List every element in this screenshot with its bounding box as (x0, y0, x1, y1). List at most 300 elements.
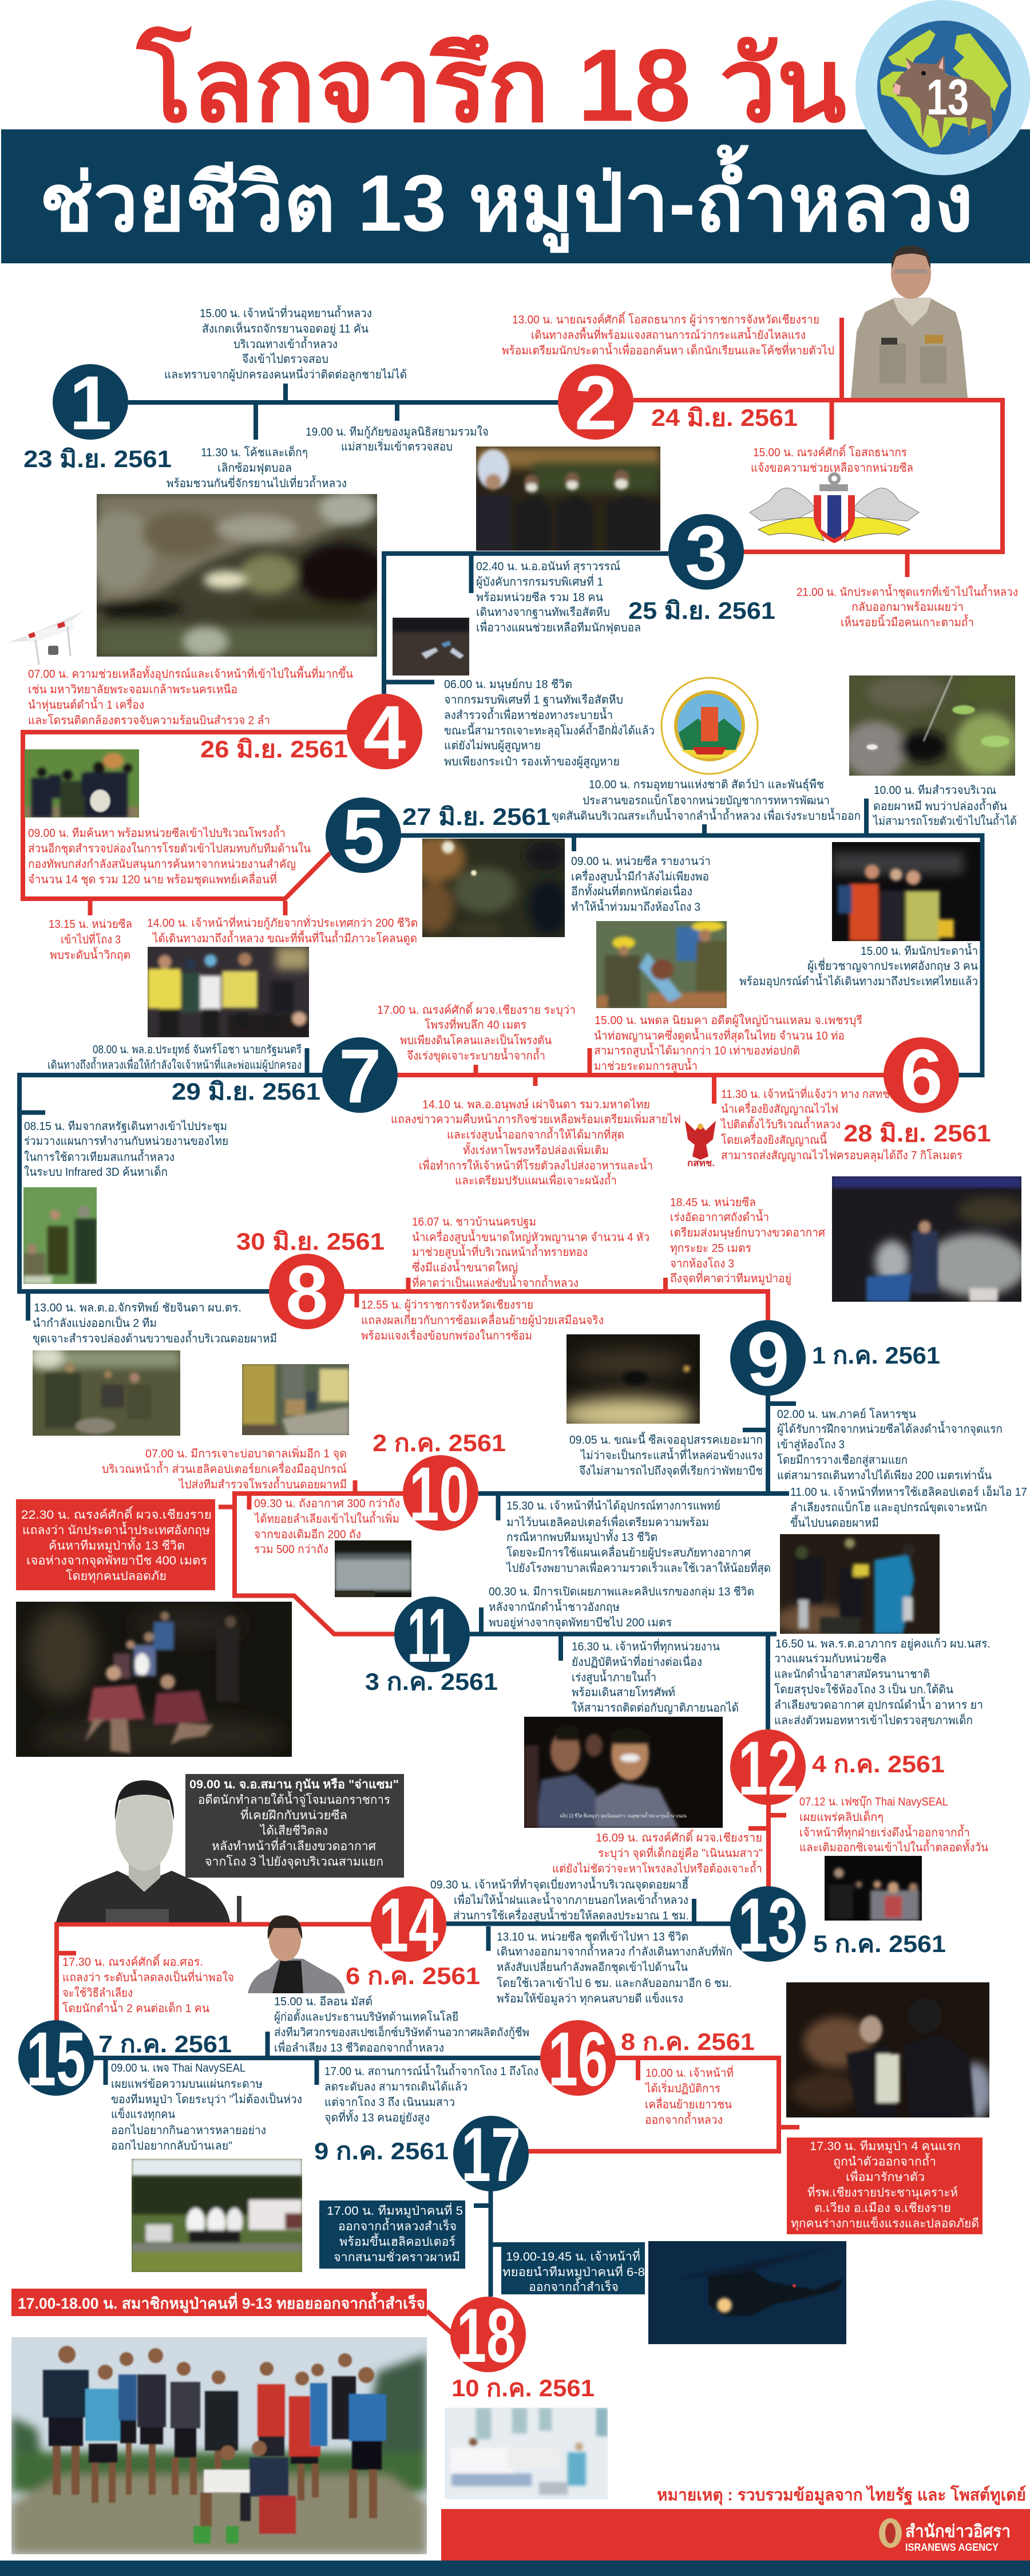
day 4 text 07.00 (28, 666, 353, 727)
day 6 text 14.10: และเร่งสูบน้ำออกจากถ้ำให้ได้มากที่สุด (447, 1127, 624, 1142)
day 8 text 18.45: 18.45 น. หน่วยซีล (670, 1196, 756, 1209)
day 6 text 11.30: โดยเครื่องยิงสัญญาณนี้ (721, 1132, 827, 1147)
day 3 text 06.00: แต่ยังไม่พบผู้สูญหาย (444, 739, 541, 753)
footer panel with Isranews logo (441, 2509, 1030, 2561)
day 4 text 14.00 (147, 915, 418, 946)
day 5 text 09.00: อีกทั้งฝนที่ตกหนักต่อเนื่อง (571, 883, 692, 898)
day 10 text 07.00 (102, 1445, 347, 1491)
day 14 connectors (57, 1896, 371, 2021)
day 8 text 18.45 (670, 1196, 825, 1286)
day 2 text 13.00: เดินทางลงพื้นที่พร้อมแจงสถานการณ์ว่ากระแสน้ำยังไหลแรง (531, 327, 806, 342)
day 1 date: 23 มิ.ย. 2561 (23, 445, 172, 472)
day 4 date: 26 มิ.ย. 2561 (200, 736, 348, 762)
day 16 date: 8 ก.ค. 2561 (621, 2028, 755, 2055)
day 11 text 16.50: 16.50 น. พล.ร.ต.อาภากร อยู่คงแก้ว ผบ.นสร. (775, 1638, 991, 1651)
day 11 text 16.30 (572, 1638, 739, 1714)
day 10 text 07.00: บริเวณหน้าถ้ำ ส่วนเฮลิคอปเตอร์ยกเครื่องมืออุปกรณ์ (102, 1461, 347, 1476)
day 7 text 08.15: ในระบบ Infrared 3D ค้นหาเด็ก (24, 1164, 168, 1179)
day 2 text 15.00 (751, 444, 913, 475)
day 4 text 13.15: พบระดับน้ำวิกฤต (50, 947, 130, 962)
day 2 text 13.00 (502, 311, 834, 357)
photo: cave interior (97, 494, 377, 657)
day 8 text 16.07: นำเครื่องสูบน้ำขนาดใหญ่หัวพญานาค จำนวน 4 หัว (412, 1229, 649, 1244)
callout: Saman Gunan death: หลังทำหน้าที่ลำเลียงขวดอากาศ (212, 1838, 377, 1853)
day 14 text 17.30 (62, 1953, 234, 2015)
photo: smiling boys in foil blankets: คลิป 13 ชีวิต ทีมหมูป่า จุดเนินนมสาว วนอุทยานถ้ำหลวง-ขุนน้ำนางนอน (560, 1812, 687, 1819)
day 11 text 16.50: โดยสรุปจะใช้ห้องโถง 3 เป็น บก.ใต้ดิน (774, 1682, 953, 1697)
day 6 text 15.00: 15.00 น. นพดล นิยมคา อดีตผู้ใหญ่บ้านแหลม จ.เพชรบุรี (595, 1014, 862, 1028)
day 14 text 15.00: 15.00 น. อีลอน มัสต์ (274, 1995, 373, 2008)
icon: globe with boar and number 13: 13 (926, 69, 969, 125)
day 15 text 09.00: ออกไปอยากกลับบ้านเลย" (111, 2139, 232, 2152)
day 11 text 16.30: 16.30 น. เจ้าหน้าที่ทุกหน่วยงาน (572, 1638, 720, 1654)
day 8 text 13.00 (33, 1301, 277, 1346)
icon: national parks department emblem (661, 678, 758, 774)
callout: Saman Gunan death (185, 1774, 404, 1878)
day 10 text 09.30: 09.30 น. ถังอากาศ 300 กว่าถัง (254, 1498, 400, 1510)
day 15 connectors (94, 2032, 541, 2085)
day 10 text 15.30: ไปยังโรงพยาบาลเพื่อความรวดเร็วและใช้เวลาให้น้อยที่สุด (505, 1560, 771, 1575)
day 8 text 13.00: นำกำลังแบ่งออกเป็น 2 ทีม (33, 1315, 157, 1330)
day 6 text 15.00: สามารถสูบน้ำได้มากกว่า 10 เท่าของท่อปกติ (594, 1042, 800, 1058)
day 1 text 19.00: 19.00 น. ทีมกู้ภัยของมูลนิธิสยามรวมใจ (306, 425, 489, 439)
day 2 text 13.00: พร้อมเตรียมนักประดาน้ำเพื่อออกค้นหา เด็กนักเรียนและโค้ชที่หายตัวไป (502, 342, 834, 357)
day 10 text 11.00: ลำเลียงรถแบ็กโฮ และอุปกรณ์ขุดเจาะหนัก (790, 1500, 987, 1515)
callout: first four boys rescued: เพื่อมารักษาตัว (846, 2168, 925, 2184)
day 8 text 12.55: 12.55 น. ผู้ว่าราชการจังหวัดเชียงราย (361, 1299, 533, 1312)
day 4 text 09.00: ส่วนอีกชุดสำรวจปล่องในการโรยตัวเข้าไปสมทบกับทีมด้านใน (28, 842, 311, 856)
callout: first four boys rescued: ทุกคนร่างกายแข็งแรงและปลอดภัยดี (791, 2215, 979, 2231)
day 12 connectors (748, 1804, 786, 1887)
day 10 text 15.30: โดยจะมีการใช้แผนเคลื่อนย้ายผู้ประสบภัยทางอากาศ (506, 1544, 751, 1560)
callout: first four boys rescued: ต.เวียง อ.เมือง จ.เชียงราย (814, 2202, 951, 2215)
photo: divers wading (786, 1982, 989, 2117)
day 9 text 02.00: แต่สามารถเดินทางไปได้เพียง 200 เมตรเท่านั้น (777, 1467, 992, 1482)
day 1 text 15.00: สังเกตเห็นรถจักรยานจอดอยู่ 11 คัน (202, 321, 369, 336)
callout: final boys rescued: 17.00-18.00 น. สมาชิกหมูป่าคนที่ 9-13 ทยอยออกจากถ้ำสำเร็จ (18, 2291, 425, 2313)
day 5 text 15.00 divers: 15.00 น. ทีมนักประดาน้ำ (861, 943, 978, 958)
day 4 text 13.15 (49, 918, 132, 962)
day 1 text 11.30: พร้อมชวนกันขี่จักรยานไปเที่ยวถ้ำหลวง (167, 475, 347, 490)
day 5 text 10.00 department: ประสานขอรถแบ็กโฮจากหน่วยบัญชาการทหารพัฒนา (583, 793, 830, 807)
callout: fifth boy rescued: พร้อมขึ้นเฮลิคอปเตอร์ (339, 2233, 455, 2249)
photo: helicopter and umbrellas (132, 2159, 302, 2272)
day 6 text 17.00 (377, 1001, 576, 1063)
day 4 text 14.00: ได้เดินทางมาถึงถ้ำหลวง ขณะที่พื้นที่ในถ้ำมีภาวะโคลนดูด (152, 930, 417, 946)
day 8 text 12.55: พร้อมแจงเรื่องข้อบกพร่องในการซ้อม (361, 1327, 532, 1342)
day 11 text 16.50: และส่งตัวหมอทหารเข้าไปตรวจสุขภาพเด็ก (774, 1713, 973, 1728)
photo: rescue officers in forest (25, 749, 139, 817)
day 10 text 15.30: กรณีหากพบทีมหมูป่าทั้ง 13 ชีวิต (506, 1529, 657, 1544)
callout: first four boys rescued (787, 2138, 983, 2234)
callout: Saman Gunan death: ได้เสียชีวิตลง (259, 1824, 328, 1838)
callout: Saman Gunan death: ที่เคยฝึกกับหน่วยซีล (240, 1807, 347, 1822)
day 5 text 09.00 (571, 855, 711, 914)
arrow: connector from final callout to day 18 (427, 2311, 453, 2334)
day 3 text 06.00: 06.00 น. มนุษย์กบ 18 ชีวิต (444, 678, 572, 692)
day 6 text 14.10: เพื่อทำการให้เจ้าหน้าที่โรยตัวลงไปส่งอาหารและน้ำ (419, 1157, 653, 1172)
callout: fifth boy rescued (319, 2200, 465, 2269)
day 11 text 00.30 (489, 1586, 754, 1630)
day 11 text 16.50: วางแผนร่วมกับหน่วยซีล (774, 1653, 886, 1665)
day 5 text 09.00: เครื่องสูบน้ำมีกำลังไม่เพียงพอ (571, 868, 709, 884)
day 9 text 09.05 (569, 1432, 763, 1478)
day 3 circle: 3 (685, 511, 728, 596)
day 6 text 11.30: สามารถส่งสัญญาณไวไฟครอบคลุมได้ถึง 7 กิโลเมตร (721, 1149, 962, 1163)
callout: first four boys rescued: 17.30 น. ทีมหมูป่า 4 คนแรก (810, 2140, 961, 2154)
day 2 circle: 2 (575, 361, 617, 446)
photo: hospital ward (445, 2408, 608, 2499)
footer panel with Isranews logo: ISRANEWS AGENCY (905, 2542, 999, 2553)
day 7 text 08.00: 08.00 น. พล.อ.ประยุทธ์ จันทร์โอชา นายกรัฐมนตรี (93, 1043, 302, 1057)
photo: helicopter at night (648, 2241, 846, 2344)
day 9 circle (730, 1317, 806, 1402)
day 6 text 11.30: ไปติดตั้งไว้บริเวณถ้ำหลวง (720, 1116, 841, 1131)
callout: team found alive: โดยทุกคนปลอดภัย (66, 1569, 167, 1583)
day 11 text 16.50: และนักดำน้ำอาสาสมัครนานาชาติ (774, 1666, 930, 1681)
day 1 text 15.00: จึงเข้าไปตรวจสอบ (242, 353, 328, 366)
day 13 text 13.10: เดินทางออกมาจากถ้ำหลวง กำลังเดินทางกลับที่พัก (497, 1943, 732, 1958)
day 5 text 15.00 divers: พร้อมอุปกรณ์ดำน้ำได้เดินทางมาถึงประเทศไทยแล้ว (739, 973, 978, 989)
callout: fifth boy rescued: ออกจากถ้ำหลวงสำเร็จ (338, 2218, 457, 2233)
day 2 text 13.00: 13.00 น. นายณรงค์ศักดิ์ โอสถธนากร ผู้ว่าราชการจังหวัดเชียงราย (512, 311, 819, 327)
day 8 text 18.45: จากห้องโถง 3 (670, 1257, 734, 1270)
photo: football team group (11, 2337, 427, 2554)
day 13 text 09.30: ส่วนการใช้เครื่องสูบน้ำช่วยให้ลดลงประมาณ 1 ชม. (453, 1907, 689, 1923)
callout: Saman Gunan death: จากโถง 3 ไปยังจุดบริเวณสามแยก (205, 1855, 383, 1869)
day 11 text 00.30: 00.30 น. มีการเปิดเผยภาพและคลิปแรกของกลุ่ม 13 ชีวิต (489, 1586, 754, 1599)
callout: fifth boy rescued: จากสนามชั่วคราวผาหมี (334, 2249, 460, 2264)
day 2 text 21.00: เห็นรอยนิ้วมือคนเกาะตามถ้ำ (841, 614, 974, 629)
day 5 text 10.00 department: ขุดสันดินบริเวณสระเก็บน้ำจากลำน้ำถ้ำหลวง เพื่อเร่งระบายน้ำออก (552, 808, 861, 823)
day 6 circle (884, 1034, 959, 1119)
day 2 text 21.00 (797, 584, 1018, 629)
title line 2: ช่วยชีวิต 13 หมูป่า-ถ้ำหลวง (39, 144, 973, 253)
day 8 text 16.07 (412, 1216, 649, 1290)
day 13 connectors (446, 1899, 731, 1951)
photo: boys and seal in cave (825, 1856, 922, 1921)
day 16 text 10.00: เคลื่อนย้ายเยาวชน (645, 2096, 732, 2111)
day 17 connectors (474, 2191, 501, 2297)
day 6 text 15.00: นำท่อพญานาคซึ่งดูดน้ำแรงที่สุดในไทย จำนวน 10 ท่อ (594, 1028, 845, 1043)
day 12 text 16.09: ระบุว่า จุดที่เด็กอยู่คือ "เนินนมสาว" (598, 1845, 763, 1860)
photo: divers in flooded cave (422, 839, 565, 937)
day 6 text 14.10 (391, 1098, 681, 1187)
day 11 text 16.30: ให้สามารถติดต่อกับญาติภายนอกได้ (572, 1701, 739, 1714)
day 2 circle (558, 361, 633, 446)
day 4 text 09.00: จำนวน 14 ชุด รวม 120 นาย พร้อมชุดแพทย์เคลื่อนที่ (28, 871, 277, 887)
day 8 text 18.45: ทุกระยะ 25 เมตร (670, 1242, 751, 1255)
callout: boys six to eight rescued: ทยอยนำทีมหมูป่าคนที่ 6-8 (502, 2263, 645, 2279)
day 15 text 09.00: ของทีมหมูป่า โดยระบุว่า "ไม่ต้องเป็นห่วง (111, 2092, 302, 2107)
callout: Saman Gunan death: อดีตนักทำลายใต้น้ำจู่โจมนอกราชการ (198, 1791, 390, 1807)
day 6 text 15.00 (594, 1014, 862, 1073)
day 3 text 02.40: เพื่อวางแผนช่วยเหลือทีมนักฟุตบอล (476, 619, 641, 635)
day 8 text 16.07: 16.07 น. ชาวบ้านนครปฐม (412, 1216, 536, 1228)
day 13 text 13.10 (497, 1929, 732, 2006)
day 11 connectors (470, 1607, 777, 1729)
day 8 text 12.55 (361, 1299, 604, 1342)
day 12 text 07.12: 07.12 น. เฟซบุ๊ก Thai NavySEAL (799, 1796, 948, 1809)
day 16 circle: 16 (548, 2017, 608, 2102)
day 4 circle: 4 (363, 690, 406, 776)
day 4 text 07.00: เช่น มหาวิทยาลัยพระจอมเกล้าพระนครเหนือ (28, 683, 237, 696)
day 9 connectors (743, 1395, 796, 1496)
photo: Saman Gunan portrait (56, 1780, 230, 1922)
photo: stacked air tanks (335, 1540, 411, 1597)
day 15 text 17.00 (324, 2063, 538, 2125)
callout: team found alive: แถลงว่า นักประดาน้ำประเทศอังกฤษ (22, 1522, 210, 1537)
day 11 text 16.30: พร้อมเดินสายโทรศัพท์ (572, 1686, 675, 1699)
day 8 text 16.07: ที่คาดว่าเป็นแหล่งซับน้ำจากถ้ำหลวง (412, 1275, 579, 1290)
day 3 text 06.00: จากกรมรบพิเศษที่ 1 ฐานทัพเรือสัตหีบ (444, 692, 623, 706)
day 5 text 15.00 divers (739, 943, 978, 989)
day 12 text 07.12: เจ้าหน้าที่ทุกฝ่ายเร่งดึงน้ำออกจากถ้ำ (799, 1824, 970, 1840)
photo: team exploring chimney (849, 675, 1015, 776)
day 10 text 15.30 (505, 1498, 771, 1575)
day 3 date: 25 มิ.ย. 2561 (628, 597, 775, 624)
callout: fifth boy rescued: 17.00 น. ทีมหมูป่าคนที่ 5 (327, 2202, 463, 2218)
day 3 circle (668, 511, 744, 596)
day 14 text 15.00 (274, 1995, 529, 2055)
day 10 text 07.00: ไปส่งทีมสำรวจโพรงถ้ำบนดอยผาหมี (178, 1476, 347, 1491)
photo: provincial governor portrait (851, 246, 968, 398)
day 10 text 15.30: 15.30 น. เจ้าหน้าที่นำได้อุปกรณ์ทางการแพทย์ (506, 1498, 720, 1513)
day 6 text 14.10: 14.10 น. พล.อ.อนุพงษ์ เผ่าจินดา รมว.มหาดไทย (422, 1098, 650, 1112)
photo: Elon Musk portrait (248, 1915, 345, 1993)
day 4 text 13.15: เข้าไปที่โถง 3 (61, 931, 121, 946)
day 5 date: 27 มิ.ย. 2561 (402, 803, 550, 830)
icon: navy seal emblem (750, 474, 919, 543)
day 11 text 16.30: เร่งสูบน้ำภายในถ้ำ (572, 1669, 656, 1685)
day 16 text 10.00: ได้เริ่มปฏิบัติการ (644, 2080, 720, 2095)
day 13 text 09.30: เพื่อไม่ให้น้ำฝนและน้ำจากภายนอกไหลเข้าถ้ำหลวง (454, 1892, 688, 1907)
day 5 text 10.00 department (552, 778, 861, 823)
callout: first four boys rescued: ที่รพ.เชียงรายประชานุเคราะห์ (807, 2184, 958, 2200)
photo: prime minister with crowd (148, 947, 309, 1037)
day 1 text 15.00: 15.00 น. เจ้าหน้าที่วนอุทยานถ้ำหลวง (200, 305, 372, 321)
day 16 text 10.00 (644, 2065, 734, 2127)
day 9 text 02.00: โดยมีการวางเชือกสู่สามแยก (777, 1453, 908, 1467)
day 2 text 21.00: 21.00 น. นักประดาน้ำชุดแรกที่เข้าไปในถ้ำหลวง (797, 584, 1018, 599)
day 17 date: 9 ก.ค. 2561 (314, 2138, 449, 2164)
day 8 text 16.07: ซึ่งมีแอ่งน้ำขนาดใหญ่ (412, 1259, 518, 1274)
footer bar (0, 2561, 1030, 2576)
photo: drilling rig and backhoe (242, 1364, 349, 1435)
day 9 text 02.00: 02.00 น. นพ.ภาคย์ โลหารชุน (777, 1408, 916, 1421)
callout: boys six to eight rescued: 19.00-19.45 น. เจ้าหน้าที่ (506, 2248, 640, 2263)
day 5 text 10.00 survey: ดอยผาหมี พบว่าปล่องถ้ำตัน (873, 798, 1007, 813)
day 7 text 08.15 (24, 1120, 228, 1179)
day 4 text 07.00: นำหุ่นยนต์ดำน้ำ 1 เครื่อง (28, 697, 144, 712)
day 14 text 17.30: โดยนักดำน้ำ 2 คนต่อเด็ก 1 คน (62, 2000, 209, 2015)
day 14 date: 6 ก.ค. 2561 (346, 1962, 480, 1989)
day 13 text 13.10: โดยใช้เวลาเข้าไป 6 ชม. และกลับออกมาอีก 6 ชม. (497, 1977, 732, 1990)
day 11 text 16.30: ยังปฏิบัติหน้าที่อย่างต่อเนื่อง (572, 1654, 702, 1669)
day 10 text 11.00: ขึ้นไปบนดอยผาหมี (790, 1515, 879, 1530)
day 6 text 11.30: 11.30 น. เจ้าหน้าที่แจ้งว่า ทาง กสทช. (721, 1086, 893, 1101)
day 8 text 16.07: มาช่วยสูบน้ำที่บริเวณหน้าถ้ำทรายทอง (412, 1244, 588, 1259)
day 6 text 14.10: ทั้งเร่งหาโพรงหรือปล่องเพิ่มเติม (463, 1142, 609, 1157)
day 10 date: 2 ก.ค. 2561 (373, 1429, 506, 1456)
icon: garuda NBTC emblem (685, 1121, 716, 1168)
day 14 text 17.30: 17.30 น. ณรงค์ศักดิ์ ผอ.ศอร. (62, 1953, 203, 1969)
day 6 text 15.00: มาช่วยระดมการสูบน้ำ (594, 1058, 698, 1073)
callout: final boys rescued (11, 2289, 427, 2316)
day 11 text 00.30: หลังจากนักดำน้ำชาวอังกฤษ (489, 1599, 620, 1614)
day 12 text 07.12 (799, 1796, 988, 1854)
day 1 text 11.30: 11.30 น. โค้ชและเด็กๆ (201, 445, 308, 459)
day 7 connectors (19, 1048, 323, 1321)
day 5 text 10.00 survey: ไม่สามารถโรยตัวเข้าไปในถ้ำได้ (872, 813, 1017, 828)
day 5 text 10.00 survey: 10.00 น. ทีมสำรวจบริเวณ (874, 784, 996, 797)
day 15 text 17.00: 17.00 น. สถานการณ์น้ำในถ้ำจากโถง 1 ถึงโถง (324, 2063, 538, 2078)
callout: team found alive: 22.30 น. ณรงค์ศักดิ์ ผวจ.เชียงราย (21, 1506, 212, 1522)
photo: air tanks at night (832, 1176, 1021, 1302)
day 6 text 17.00: 17.00 น. ณรงค์ศักดิ์ ผวจ.เชียงราย ระบุว่า (377, 1001, 576, 1017)
day 9 date: 1 ก.ค. 2561 (812, 1342, 940, 1369)
day 6 text 17.00: พบเพียงดินโคลนและเป็นโพรงตัน (400, 1033, 552, 1047)
day 8 connectors (344, 1278, 768, 1320)
day 7 text 08.15: ร่วมวางแผนการทำงานกับหน่วยงานของไทย (24, 1135, 228, 1148)
day 8 text 12.55: แถลงผลเกี่ยวกับการซ้อมเคลื่อนย้ายผู้ป่วยเสมือนจริง (361, 1312, 604, 1327)
day 3 text 02.40 (476, 560, 641, 635)
day 5 text 09.00: 09.00 น. หน่วยซีล รายงานว่า (571, 855, 711, 868)
day 13 circle: 13 (738, 1883, 798, 1968)
day 9 text 02.00 (777, 1408, 1003, 1482)
day 6 text 11.30 (720, 1086, 962, 1163)
day 7 text 08.15: 08.15 น. ทีมจากสหรัฐเดินทางเข้าไปประชุม (24, 1120, 227, 1133)
day 6 text 17.00: โพรงที่พบลึก 40 เมตร (425, 1017, 526, 1032)
day 2 date: 24 มิ.ย. 2561 (651, 404, 798, 431)
day 3 text 02.40: 02.40 น. น.อ.อนันท์ สุราวรรณ์ (476, 560, 620, 574)
day 14 text 15.00: ผู้ก่อตั้งและประธานบริษัทด้านเทคโนโลยี (274, 2009, 458, 2024)
day 15 text 09.00 (111, 2062, 302, 2152)
day 15 text 17.00: จุดที่ทั้ง 13 คนอยู่ยังสูง (324, 2109, 430, 2125)
photo: US team in jungle (23, 1187, 97, 1284)
photo: soldiers resting on hillside (33, 1350, 180, 1436)
day 7 text 08.15: ในการใช้ดาวเทียมสแกนถ้ำหลวง (24, 1149, 175, 1164)
photo: boys found in cave (16, 1602, 292, 1757)
day 11 date: 3 ก.ค. 2561 (365, 1668, 498, 1695)
day 10 text 15.30: มาไว้บนเฮลิคอปเตอร์เพื่อเตรียมความพร้อม (506, 1514, 709, 1529)
day 6 text 17.00: จึงเร่งขุดเจาะระบายน้ำจากถ้ำ (407, 1048, 545, 1063)
day 10 text 09.30: ได้ทยอยลำเลียงเข้าไปในถ้ำเพิ่ม (253, 1511, 399, 1526)
day 3 text 06.00: พบเพียงกระเป๋า รองเท้าของผู้สูญหาย (444, 756, 620, 769)
day 9 text 02.00: เข้าสู่ห้องโถง 3 (777, 1438, 845, 1452)
day 11 circle: 11 (407, 1593, 451, 1678)
day 9 circle: 9 (747, 1317, 790, 1402)
day 1 text 11.30 (167, 445, 347, 490)
day 13 text 09.30: 09.30 น. เจ้าหน้าที่ทำจุดเบี่ยงทางน้ำบริเวณจุดดอยผาฮี้ (430, 1876, 689, 1892)
day 9 text 09.05: 09.05 น. ขณะนี้ ซีลเจออุปสรรคเยอะมาก (569, 1432, 763, 1447)
day 15 circle: 15 (26, 2017, 86, 2102)
day 1 circle: 1 (69, 361, 112, 446)
day 1 text 19.00: แม่สายเริ่มเข้าตรวจสอบ (341, 438, 453, 453)
day 4 text 09.00: 09.00 น. ทีมค้นหา พร้อมหน่วยซีลเข้าไปบริเวณโพรงถ้ำ (28, 825, 286, 840)
day 7 text 08.00: เดินทางถึงถ้ำหลวงเพื่อให้กำลังใจเจ้าหน้าที่และพ่อแม่ผู้ปกครอง (47, 1057, 302, 1072)
photo: british divers at night (832, 842, 980, 941)
day 4 text 09.00: กองทัพบกส่งกำลังสนับสนุนการค้นหาจากหน่วยงานสำคัญ (28, 858, 296, 871)
day 4 text 09.00 (28, 825, 311, 887)
day 11 text 16.50: ลำเลียงขวดอากาศ อุปกรณ์ดำน้ำ อาหาร ยา (774, 1697, 983, 1712)
day 15 text 17.00: ลดระดับลง สามารถเดินได้แล้ว (324, 2080, 468, 2093)
day 13 text 13.10: พร้อมให้ข้อมูลว่า ทุกคนสบายดี แข็งแรง (497, 1991, 683, 2006)
day 15 text 17.00: แต่จากโถง 3 ถึง เนินนมสาว (324, 2096, 455, 2109)
day 4 text 14.00: 14.00 น. เจ้าหน้าที่หน่วยกู้ภัยจากทั่วประเทศกว่า 200 ชีวิต (147, 915, 418, 930)
day 10 circle: 10 (409, 1452, 469, 1537)
day 2 text 21.00: กลับออกมาพร้อมเผยว่า (851, 601, 964, 614)
day 5 text 09.00: ทำให้น้ำท่วมมาถึงห้องโถง 3 (571, 899, 700, 914)
photo: navy seal divers (476, 447, 660, 551)
day 3 text 02.40: ผู้บังคับการกรมรบพิเศษที่ 1 (476, 574, 603, 589)
day 8 circle: 8 (286, 1250, 328, 1336)
day 10 text 11.00 (790, 1484, 1027, 1530)
day 16 text 10.00: 10.00 น. เจ้าหน้าที่ (645, 2065, 734, 2080)
day 14 text 15.00: เพื่อลำเลียง 13 ชีวิตออกจากถ้ำหลวง (274, 2040, 444, 2055)
day 15 text 09.00: เผยแพร่ข้อความบนแผ่นกระดาษ (111, 2078, 263, 2091)
callout: team found alive: เจอห่างจากจุดพัทยาบีช 400 เมตร (26, 1554, 207, 1568)
day 3 text 06.00 (444, 678, 655, 769)
day 8 text 13.00: ขุดเจาะสำรวจปล่องด้านขวาของถ้ำบริเวณดอยผาหมี (33, 1330, 277, 1346)
day 13 date: 5 ก.ค. 2561 (813, 1930, 946, 1957)
day 6 text 14.10: และเตรียมปรับแผนเพื่อเจาะผนังถ้ำ (455, 1172, 617, 1187)
day 13 text 13.10: 13.10 น. หน่วยซีล ชุดที่เข้าไปหา 13 ชีวิต (497, 1929, 688, 1944)
day 13 text 13.10: หลังสับเปลี่ยนกำลังพลอีกชุดเข้าไปด้านใน (497, 1959, 688, 1974)
icon: garuda NBTC emblem: กสทช. (687, 1159, 715, 1168)
day 16 text 10.00: ออกจากถ้ำหลวง (645, 2112, 723, 2127)
day 1 circle (53, 361, 128, 446)
callout: boys six to eight rescued (501, 2242, 645, 2294)
photo: smiling boys in foil blankets (524, 1717, 723, 1828)
day 11 text 00.30: พบอยู่ห่างจากจุดพัทยาบีชไป 200 เมตร (489, 1616, 672, 1630)
day 12 text 07.12: และเติมออกซิเจนเข้าไปในถ้ำตลอดทั้งวัน (799, 1839, 988, 1854)
day 8 circle (269, 1250, 344, 1336)
day 14 text 17.30: จะใช้วิธีลำเลียง (62, 1986, 133, 2000)
day 1 text 11.30: เลิกซ้อมฟุตบอล (217, 462, 292, 475)
day 8 text 13.00: 13.00 น. พล.ต.อ.จักรทิพย์ ชัยจินดา ผบ.ตร. (34, 1301, 241, 1314)
day 9 text 02.00: ผู้ได้รับการฝึกจากหน่วยซีลได้ลงดำน้ำจากจุดแรก (777, 1421, 1003, 1436)
photo: diver in dark water (566, 1334, 700, 1424)
day 7 circle (322, 1034, 398, 1119)
title line 1: โลกจารึก 18 วัน (136, 26, 846, 143)
day 8 text 18.45: เตรียมส่งมนุษย์กบวางขวดอากาศ (670, 1226, 825, 1240)
day 5 connectors (401, 799, 982, 1075)
day 12 text 16.09: 16.09 น. ณรงค์ศักดิ์ ผวจ.เชียงราย (596, 1829, 762, 1844)
day 4 connectors (23, 732, 347, 915)
day 3 text 06.00: ขณะนี้สามารถเจาะทะลุอุโมงค์ถ้ำอีกฝั่งได้แล้ว (444, 722, 655, 738)
day 5 circle: 5 (342, 794, 385, 879)
note: data sources: หมายเหตุ : รวบรวมข้อมูลจาก ไทยรัฐ และ โพสต์ทูเดย์ (657, 2484, 1026, 2506)
day 16 connectors (528, 2058, 799, 2151)
day 5 text 15.00 divers: ผู้เชี่ยวชาญจากประเทศอังกฤษ 3 คน (807, 958, 978, 973)
day 3 text 06.00: ลงสำรวจถ้ำเพื่อหาช่องทางระบายน้ำ (444, 707, 613, 722)
day 12 text 16.09 (552, 1829, 763, 1875)
day 1 text 19.00 (306, 425, 489, 453)
day 1 connectors (128, 384, 558, 440)
day 11 text 16.50 (774, 1638, 991, 1728)
callout: Saman Gunan death: 09.00 น. จ.อ.สมาน กุนัน หรือ "จ่าแซม" (189, 1777, 399, 1792)
day 10 text 09.30: รวม 500 กว่าถัง (254, 1543, 328, 1556)
photo: workers with pipe (596, 921, 727, 1008)
day 17 circle: 17 (461, 2112, 521, 2198)
day 1 text 15.00: และทราบจากผู้ปกครองคนหนึ่งว่าติดต่อลูกชายไม่ได้ (164, 366, 407, 382)
day 12 date: 4 ก.ค. 2561 (812, 1751, 945, 1777)
footer panel with Isranews logo: สำนักข่าวอิศรา (905, 2522, 1011, 2541)
callout: first four boys rescued: ถูกนำตัวออกจากถ้ำ (833, 2153, 936, 2169)
callout: boys six to eight rescued: ออกจากถ้ำสำเร็จ (529, 2278, 619, 2294)
day 6 circle: 6 (900, 1034, 943, 1119)
